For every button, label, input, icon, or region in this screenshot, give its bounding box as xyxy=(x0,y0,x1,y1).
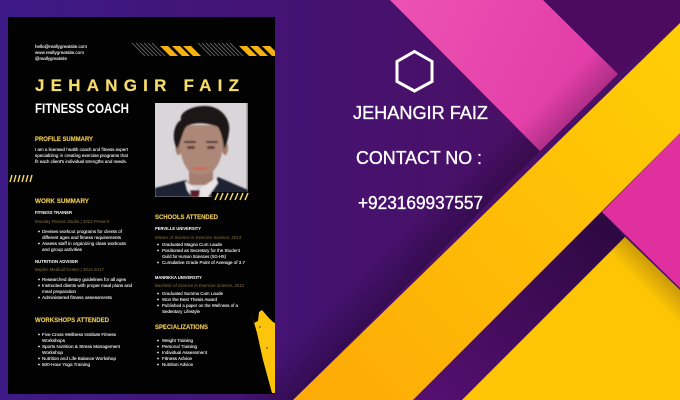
specializations: Weight Training xyxy=(162,338,193,344)
job title: FITNESS COACH xyxy=(35,101,129,116)
schools attended: Graduated Summa Cum Laude xyxy=(162,291,223,297)
workshops attended: Nutrition and Life Balance Workshop xyxy=(42,356,116,362)
decorative hazard stripes top xyxy=(132,43,280,56)
lower yellow shape xyxy=(462,237,680,400)
eyes xyxy=(187,146,195,149)
workshops attended xyxy=(35,317,121,368)
decorative slashes right xyxy=(212,192,250,202)
mouth xyxy=(193,167,207,170)
ears xyxy=(176,141,182,155)
workshops attended: Workshops xyxy=(42,338,66,344)
icon: hexagon logo xyxy=(397,52,432,91)
schools attended: PERVILLE UNIVERSITY xyxy=(155,226,202,232)
neck xyxy=(188,170,214,186)
contact details xyxy=(35,44,87,62)
pink band shadow xyxy=(390,0,618,151)
work summary: Monday Fitness Studio | 2021-Present xyxy=(35,219,110,225)
work summary: Administered fitness assessments xyxy=(42,295,113,301)
shirt xyxy=(185,178,218,197)
profile summary: I am a licensed health coach and fitness expert xyxy=(35,147,129,153)
dark purple top right corner xyxy=(543,0,680,74)
specializations: Personal Training xyxy=(162,344,197,350)
photo xyxy=(155,103,248,197)
work summary: Devises workout programs for clients of xyxy=(42,229,123,235)
name heading: JEHANGIR FAIZ xyxy=(353,103,488,123)
schools attended: Sedentary Lifestyle xyxy=(162,309,200,315)
schools attended xyxy=(155,214,245,315)
pink top band xyxy=(390,0,618,151)
shadow beside yellow band xyxy=(200,60,540,400)
specializations xyxy=(155,324,209,368)
contact details: @reallygreatsite xyxy=(35,56,67,62)
suit xyxy=(155,177,248,197)
schools attended: Published a paper on the Wellness of a xyxy=(162,303,238,309)
workshops attended: Five Cross Wellness Institute Fitness xyxy=(42,332,117,338)
pink right triangle xyxy=(602,133,680,288)
schools attended: Bachelor of Science in Exercise Science, 2012 xyxy=(155,283,244,289)
profile summary: PROFILE SUMMARY xyxy=(35,136,94,143)
yellow brush stroke xyxy=(251,310,275,393)
schools attended: SCHOOLS ATTENDED xyxy=(155,214,218,221)
profile summary: fit each client's individual strengths and needs. xyxy=(35,159,127,165)
tie xyxy=(190,190,200,197)
work summary: different ages and fitness requirements xyxy=(42,235,122,241)
main yellow band xyxy=(293,23,680,400)
specializations: SPECIALIZATIONS xyxy=(155,324,209,331)
decorative slashes left xyxy=(10,175,32,182)
work summary: NUTRITION ADVISER xyxy=(35,259,78,265)
work summary: FITNESS TRAINER xyxy=(35,210,72,216)
work summary xyxy=(35,198,132,301)
workshops attended: WORKSHOPS ATTENDED xyxy=(35,317,109,324)
hair xyxy=(174,106,229,149)
specializations: Fitness Advice xyxy=(162,356,192,362)
resume name: JEHANGIR FAIZ xyxy=(35,76,239,95)
schools attended: Graduated Magna Cum Laude xyxy=(162,242,222,248)
work summary: Bayleo Medical Center | 2014-2017 xyxy=(35,267,104,273)
work summary: WORK SUMMARY xyxy=(35,198,90,205)
phone number: +923169937557 xyxy=(358,193,483,213)
work summary: meal preparation xyxy=(42,289,76,295)
specializations: Nutrition Advice xyxy=(162,362,193,368)
face xyxy=(180,125,223,174)
panel: resume xyxy=(8,17,280,394)
eyebrows xyxy=(184,141,196,143)
work summary: Assess staff in organizing class workouts xyxy=(42,241,127,247)
workshops attended: Workshop xyxy=(42,350,63,356)
profile summary: specializing in creating exercise programs that xyxy=(35,153,129,159)
contact details: hello@reallygreatsite.com xyxy=(35,44,87,50)
purple strip xyxy=(413,212,625,400)
schools attended: Guild for Human Sciences (SG-HS) xyxy=(162,254,226,260)
resume background xyxy=(8,17,275,394)
work summary: Instructed clients with proper meal plans and xyxy=(42,283,132,289)
lower yellow shadow xyxy=(462,237,680,400)
schools attended: Cumulative Grade Point of Average of 3.7 xyxy=(162,260,245,266)
workshops attended: 500-Hour Yoga Training xyxy=(42,362,90,368)
work summary: and group activities xyxy=(42,247,83,253)
work summary: Researched dietary guidelines for all ages xyxy=(42,277,127,283)
contact label: CONTACT NO : xyxy=(356,148,482,168)
contact details: www.reallygreatsite.com xyxy=(35,50,84,56)
schools attended: Positioned as Secretary for the Student xyxy=(162,248,241,254)
schools attended: Master of Science in Exercise Science, 2013 xyxy=(155,235,241,241)
specializations: Individual Assessment xyxy=(162,350,208,356)
profile summary xyxy=(35,136,129,165)
workshops attended: Sports Nutrition & Stress Management xyxy=(42,344,121,350)
schools attended: Won the Best Thesis Award xyxy=(162,297,217,303)
panel: geometric shapes xyxy=(200,0,680,400)
schools attended: MANRIKKA UNIVERSITY xyxy=(155,275,203,281)
